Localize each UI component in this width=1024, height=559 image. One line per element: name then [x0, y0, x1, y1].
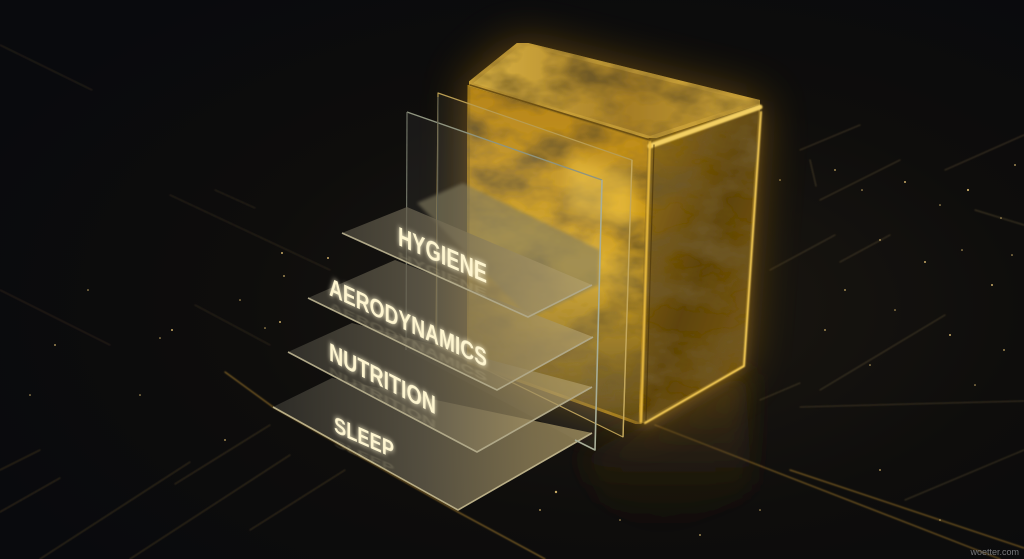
front pane right edge [575, 160, 632, 450]
label reflection: hygiene: HYGIENE [398, 249, 487, 300]
bright reflection on cube [568, 155, 634, 230]
label reflection: nutrition: NUTRITION [329, 365, 436, 431]
label: aerodynamics: AERODYNAMICS [329, 273, 487, 374]
label: nutrition: NUTRITION [329, 338, 436, 421]
cube highlights [470, 85, 761, 423]
cube top face [469, 43, 760, 138]
shelf: hygiene [342, 207, 592, 317]
label: sleep: SLEEP [334, 411, 394, 464]
cube right face [641, 104, 760, 423]
label reflection: aerodynamics: AERODYNAMICS [329, 299, 487, 384]
shelf: aerodynamics [308, 260, 593, 390]
floor specks [29, 164, 1016, 536]
back glass pane [436, 93, 632, 437]
front glass pane [406, 97, 602, 450]
shelf: sleep [273, 378, 592, 510]
cube floor reflection [580, 372, 752, 540]
watermark: woetter.com [969, 547, 1019, 557]
label reflection: sleep: SLEEP [334, 437, 394, 475]
gold cube [467, 43, 761, 424]
shelf: nutrition [288, 323, 592, 452]
label: hygiene: HYGIENE [398, 222, 487, 290]
cube left face [467, 85, 649, 424]
cube glow [468, 42, 762, 423]
ghost shelf reflection [417, 183, 600, 318]
